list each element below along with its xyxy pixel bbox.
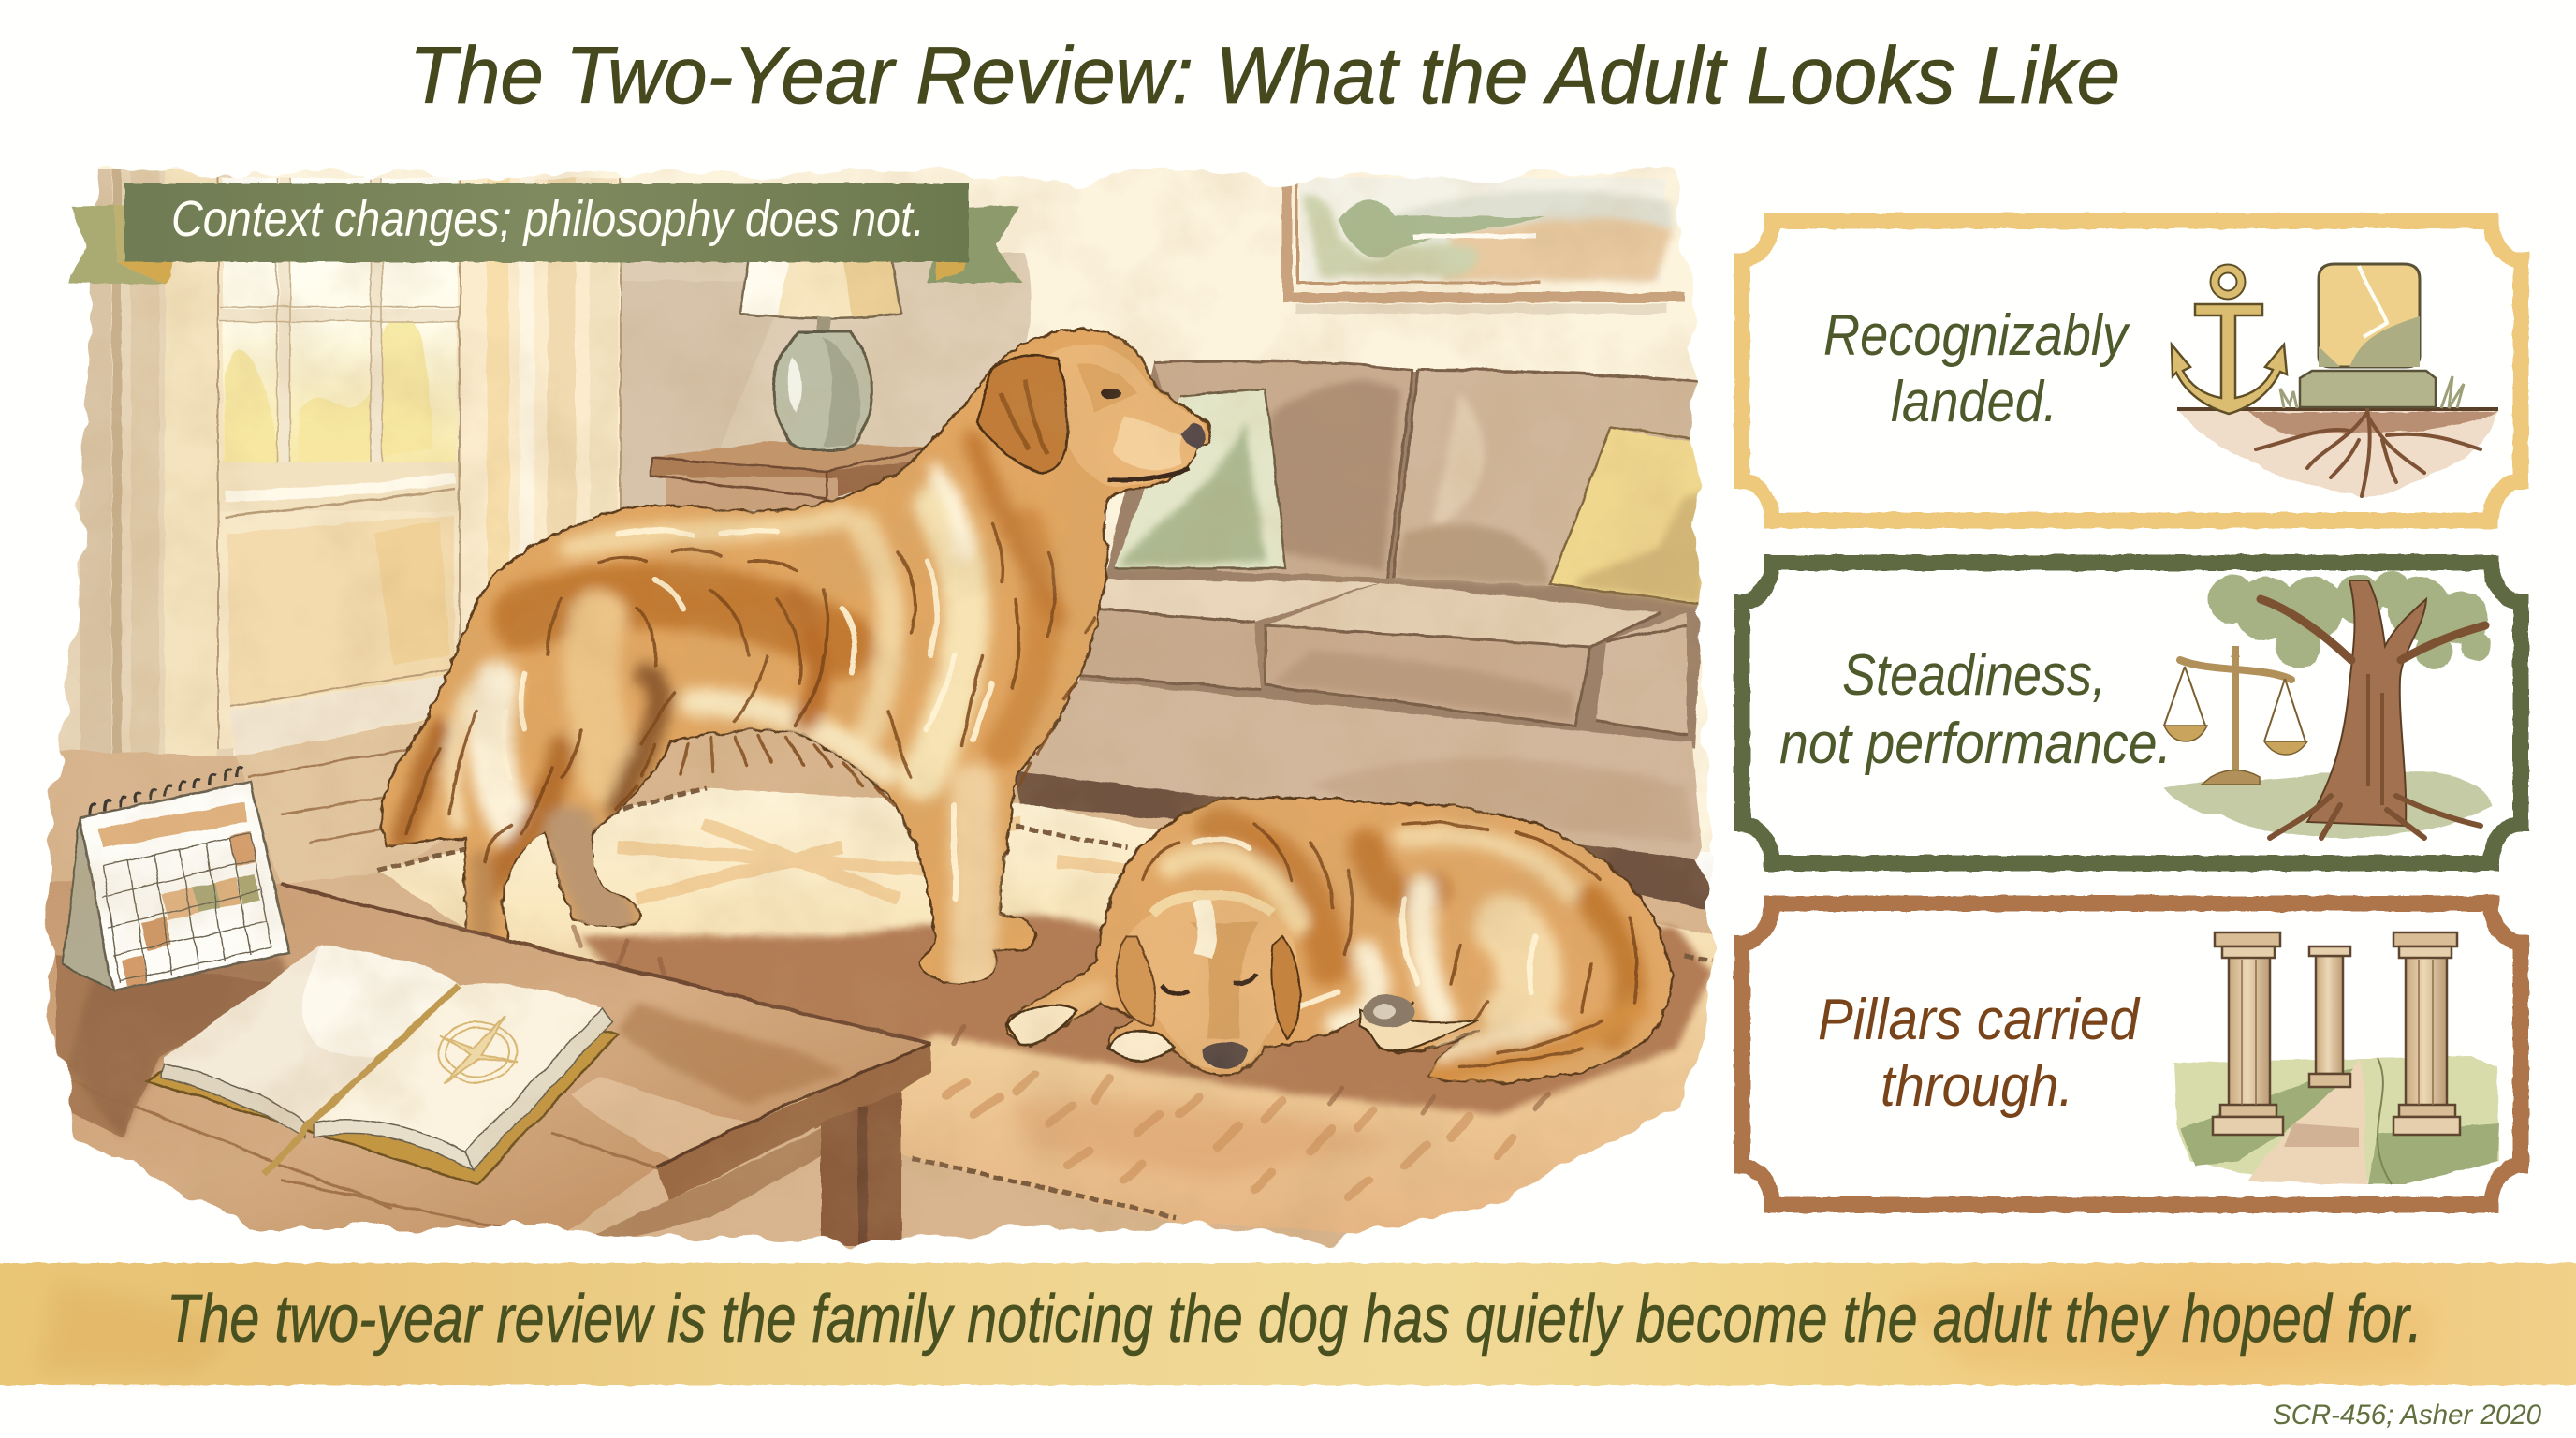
icon: anchor bbox=[2172, 269, 2287, 414]
resting dog silhouette bbox=[1007, 798, 1671, 1082]
icon: cracked foundation stone bbox=[2280, 264, 2464, 408]
card: recognizably landed bbox=[1742, 221, 2521, 521]
title: The Two-Year Review: What the Adult Looks Like bbox=[409, 31, 2120, 121]
card 2 text bbox=[1779, 643, 2172, 776]
card 3 text bbox=[1818, 988, 2141, 1119]
right column bbox=[2393, 932, 2460, 1135]
side table bbox=[650, 441, 924, 511]
resting dog fine fur bbox=[1142, 823, 1637, 1067]
card 1 text: Recognizably bbox=[1823, 303, 2130, 368]
card: steadiness, not performance bbox=[1742, 563, 2521, 863]
left ribbon tail bbox=[68, 205, 173, 285]
shadow: calendar and book bbox=[66, 955, 300, 1137]
fine fur strokes bbox=[406, 524, 1095, 899]
card 2 text: Steadiness, bbox=[1842, 643, 2106, 708]
dog washes bbox=[402, 440, 1058, 974]
card 3 text: through. bbox=[1881, 1054, 2073, 1119]
desk calendar bbox=[63, 768, 289, 990]
green pillow bbox=[1114, 389, 1286, 568]
coffee table bbox=[19, 880, 931, 1259]
table lamp bbox=[740, 253, 901, 449]
floor bbox=[28, 697, 1722, 1255]
card: pillars carried through bbox=[1742, 903, 2521, 1205]
resting dog washes bbox=[1030, 829, 1638, 1075]
ribbon body bbox=[124, 183, 969, 262]
framed painting bbox=[1287, 169, 1685, 309]
panel: living room watercolor scene bbox=[19, 140, 1741, 1264]
sofa bbox=[1012, 361, 1704, 859]
icon: three columns bbox=[2213, 932, 2460, 1135]
icon: soil and roots bbox=[2177, 409, 2498, 497]
right ribbon tail bbox=[927, 205, 1022, 283]
icon: grassy ground and path bbox=[2174, 1056, 2499, 1184]
standing golden retriever bbox=[381, 330, 1210, 982]
card 1 text bbox=[1823, 303, 2130, 434]
takeaway band bbox=[0, 1263, 2576, 1385]
dog body silhouette bbox=[381, 330, 1210, 982]
icon: balance scale bbox=[2164, 646, 2307, 785]
left column bbox=[2213, 932, 2283, 1135]
dog face bbox=[976, 345, 1206, 487]
banner ribbon bbox=[68, 183, 1022, 285]
wall bbox=[37, 140, 1741, 852]
citation: SCR-456; Asher 2020 bbox=[2273, 1400, 2541, 1431]
middle column bbox=[2309, 946, 2350, 1087]
resting dog head bbox=[1007, 895, 1479, 1069]
rug bbox=[378, 788, 1722, 1236]
banner text: Context changes; philosophy does not. bbox=[171, 191, 925, 247]
band wash bbox=[0, 1263, 2576, 1385]
open book with compass rose bbox=[146, 945, 618, 1184]
card 1 text: landed. bbox=[1891, 370, 2057, 434]
icon: oak tree bbox=[2208, 571, 2491, 838]
card 2 text: not performance. bbox=[1779, 712, 2172, 776]
card 3 text: Pillars carried bbox=[1818, 988, 2141, 1052]
curtains and window bbox=[58, 169, 622, 756]
paper-grain mottling bbox=[28, 140, 1732, 1264]
sleeping golden retriever bbox=[1007, 798, 1671, 1082]
icon: ground wash bbox=[2163, 772, 2493, 838]
compass rose bbox=[438, 1016, 518, 1084]
yellow pillow bbox=[1550, 427, 1710, 604]
